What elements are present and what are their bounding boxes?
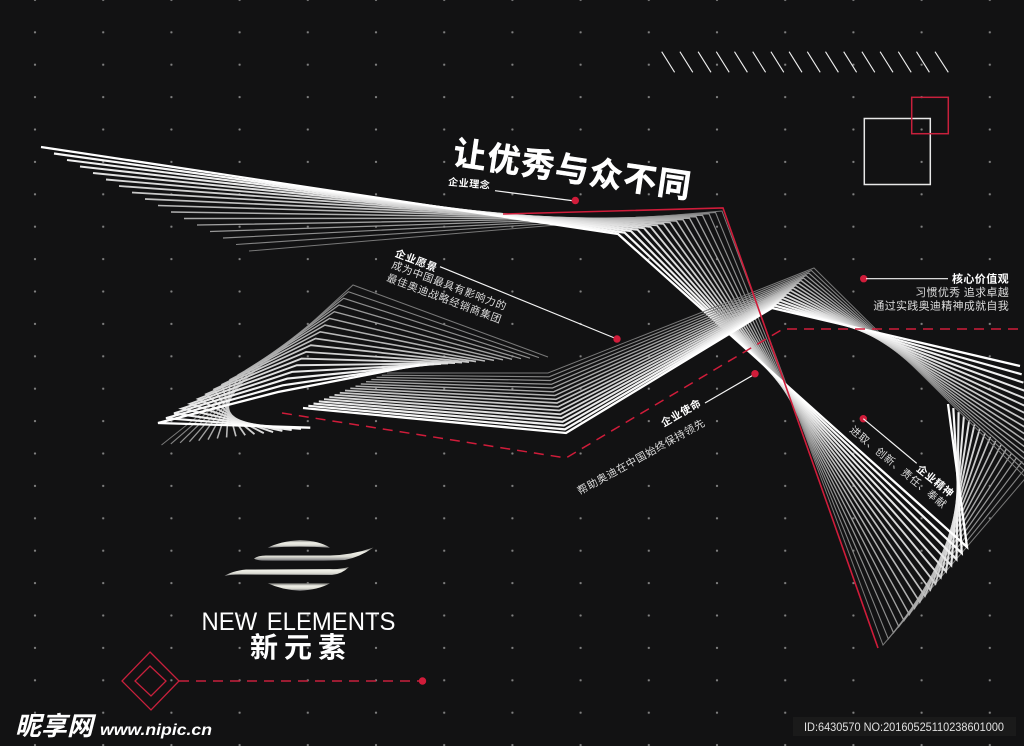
overlapping squares icon <box>864 97 948 184</box>
diamond icon <box>122 652 179 710</box>
callout: core values: 核心价值观 <box>952 272 1009 286</box>
watermark left <box>15 711 212 741</box>
callout: corporate mission: 企业使命 <box>659 396 704 430</box>
callout: corporate spirit: 企业精神 <box>914 462 957 500</box>
title: 让优秀与众不同 <box>451 134 694 205</box>
logo wordmark <box>202 608 396 663</box>
line fan: left folded wing <box>158 285 548 445</box>
callout: corporate vision: 最佳奥迪战略经销商集团 <box>385 271 504 326</box>
dashed connector with end dot <box>179 677 426 685</box>
watermark id box: ID:6430570 NO:20160525110238601000 <box>804 720 1004 734</box>
logo wordmark: 新元素 <box>250 632 352 663</box>
callout: corporate philosophy: 企业理念 <box>448 175 491 192</box>
watermark left: 昵享网 <box>15 711 97 741</box>
callout: corporate spirit: 进取、创新、责任、奉献 <box>847 423 949 511</box>
red dashed route <box>282 329 1024 458</box>
callout: core values <box>860 272 1009 312</box>
callout: corporate vision: 企业愿景 <box>393 247 439 275</box>
callout: corporate philosophy <box>448 175 579 204</box>
callout: corporate vision <box>385 247 621 343</box>
watermark left: www.nipic.cn <box>100 722 212 739</box>
callout: core values: 通过实践奥迪精神成就自我 <box>873 298 1009 312</box>
callout: core values: 习惯优秀 追求卓越 <box>915 285 1009 299</box>
line fan: middle band rising to the right edge <box>303 268 1024 499</box>
red angled outline <box>503 208 878 648</box>
callout: corporate mission <box>575 370 759 498</box>
callout: corporate mission: 帮助奥迪在中国始终保持领先 <box>575 416 708 498</box>
callout: corporate vision: 成为中国最具有影响力的 <box>390 258 509 313</box>
decorative hatch strokes <box>662 52 948 72</box>
logo wordmark: NEW ELEMENTS <box>202 608 396 636</box>
logo mark <box>224 540 374 591</box>
watermark id box <box>793 717 1016 736</box>
line fan: upper swoop from top left through to lower right <box>41 147 1024 645</box>
